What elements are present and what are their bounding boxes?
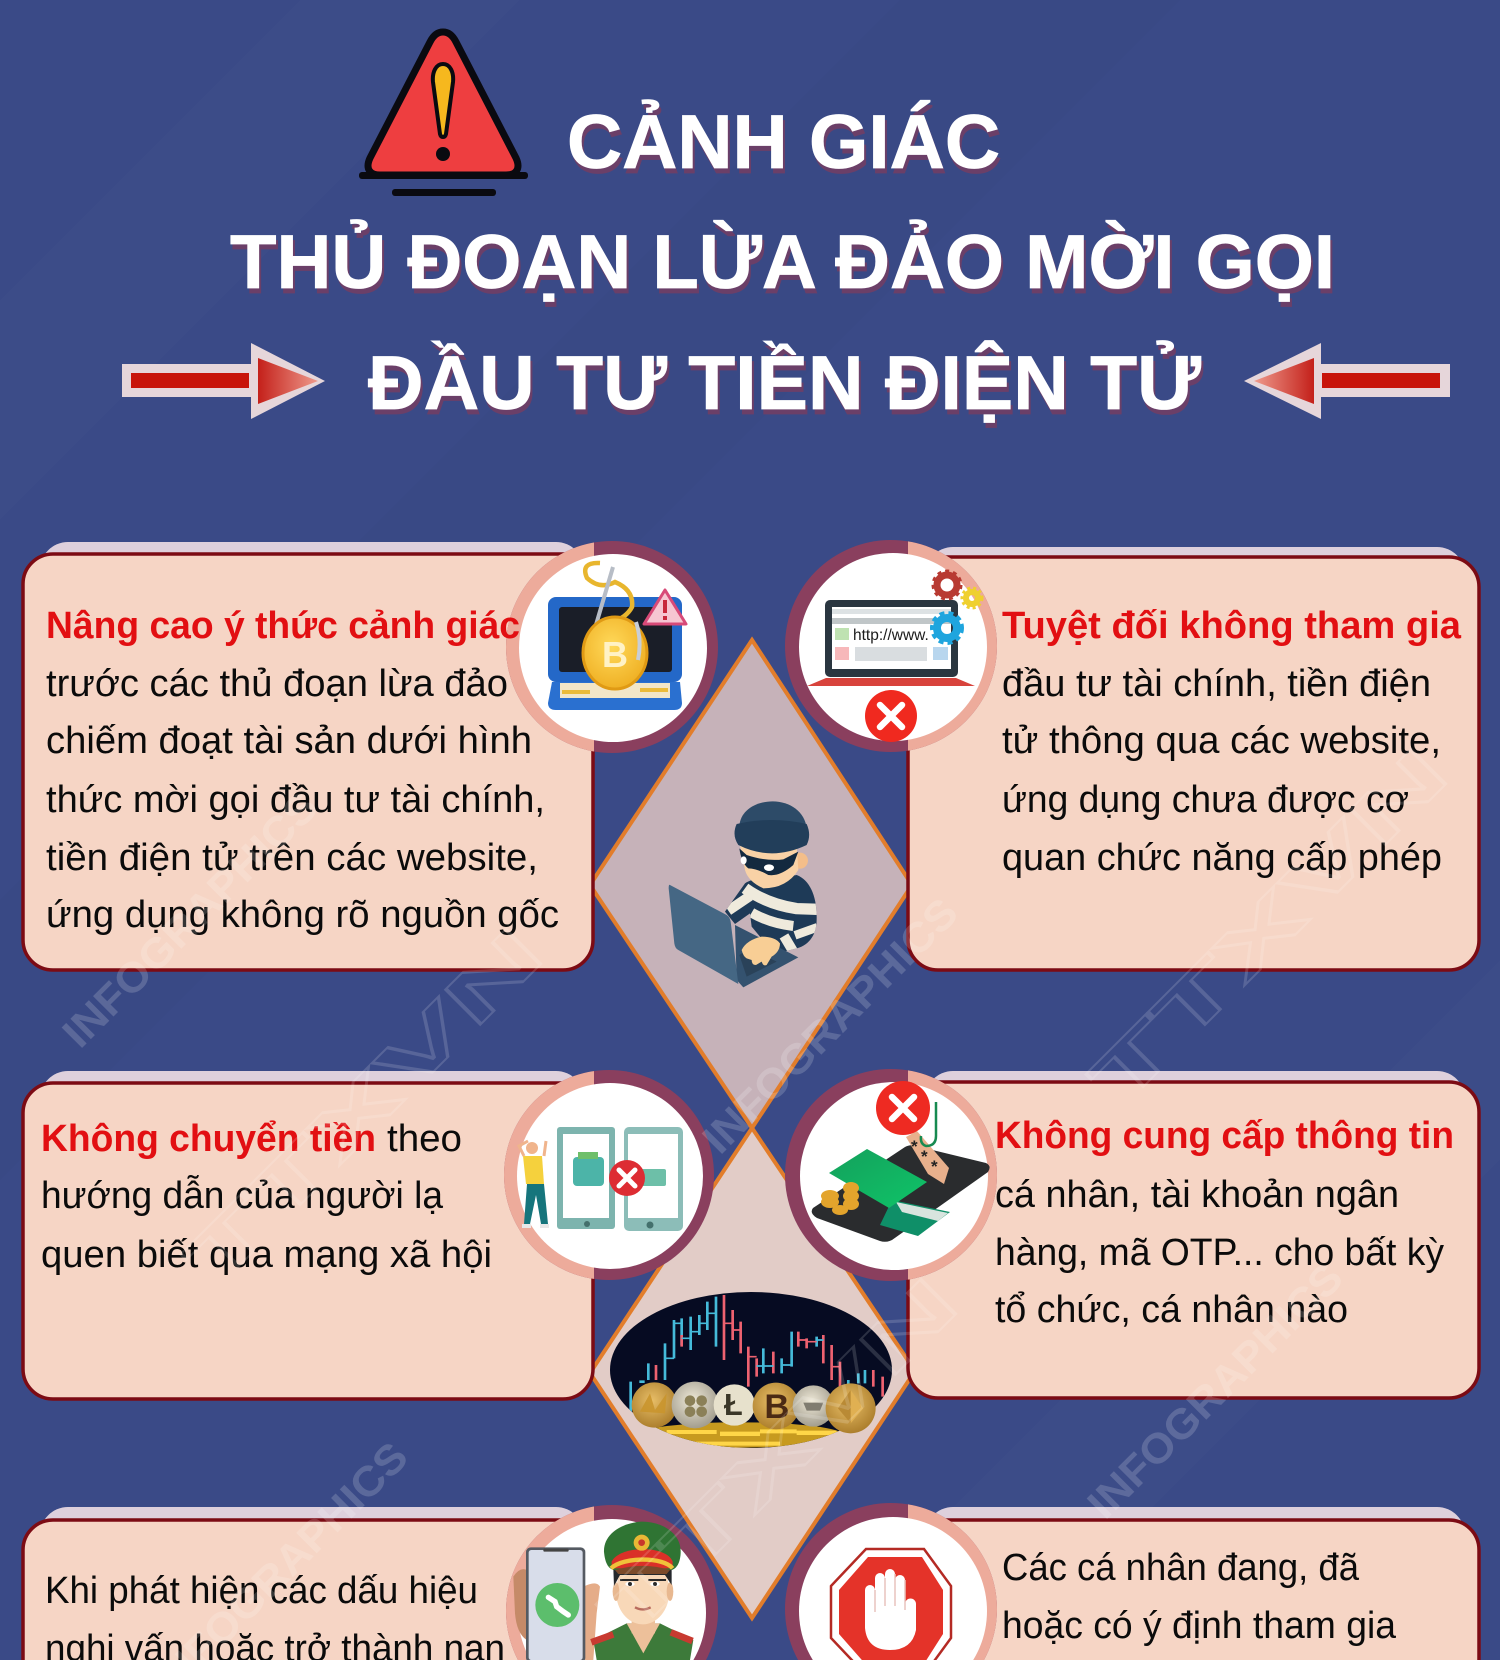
panel: card 3 — [23, 1070, 714, 1399]
text: card 2: ứng dụng chưa được cơ — [1002, 779, 1409, 821]
text: card 3: Không chuyển tiền — [41, 1118, 376, 1160]
title — [230, 100, 1335, 426]
text: card 3: hướng dẫn của người lạ — [41, 1174, 444, 1217]
text: card 1: thức mời gọi đầu tư tài chính, — [46, 779, 545, 821]
text: card 3 — [41, 1118, 492, 1276]
text: card 1 — [46, 605, 559, 936]
text: card 2: quan chức năng cấp phép — [1002, 837, 1442, 879]
icon: circle do not transfer money — [504, 1070, 714, 1280]
text: card 2: tử thông qua các website, — [1002, 720, 1441, 762]
panel: card 5 — [23, 1505, 718, 1660]
text: card 4: tổ chức, cá nhân nào — [995, 1289, 1348, 1331]
icon: warning triangle — [359, 32, 528, 196]
text: card 3: theo — [387, 1118, 462, 1160]
text: card 6: Các cá nhân đang, đã — [1002, 1547, 1360, 1589]
icon: circle bank cards and OTP: * — [921, 1147, 928, 1166]
panel: upper centre diamond — [590, 640, 912, 1128]
watermark: INFOGRAPHICS and TTXVN — [53, 732, 1464, 1660]
watermark: INFOGRAPHICS and TTXVN: INFOGRAPHICS — [693, 889, 967, 1162]
text: card 2 — [1002, 605, 1462, 879]
icon: circle police officer and phone — [506, 1505, 718, 1660]
arrow: right — [1244, 343, 1450, 419]
text: card 3: quen biết qua mạng xã hội — [41, 1234, 492, 1276]
text: card 1: chiếm đoạt tài sản dưới hình — [46, 720, 532, 762]
icon: circle bank cards and OTP: * — [931, 1157, 938, 1176]
icon: circle phishing bitcoin laptop: B — [602, 634, 628, 675]
icon: crypto chart with coins: Ł — [724, 1388, 743, 1422]
arrow: left — [122, 343, 325, 419]
text: card 6 — [1002, 1547, 1397, 1647]
icon: crypto chart with coins: B — [764, 1388, 789, 1426]
watermark: INFOGRAPHICS and TTXVN: TTXVN — [1075, 732, 1464, 1121]
watermark: INFOGRAPHICS and TTXVN: INFOGRAPHICS — [1078, 1254, 1352, 1527]
text: card 2: đầu tư tài chính, tiền điện — [1002, 663, 1431, 705]
icon: circle bank cards and OTP — [785, 1069, 997, 1281]
text: card 1: Nâng cao ý thức cảnh giác — [46, 605, 520, 647]
text: card 1: ứng dụng không rõ nguồn gốc — [46, 894, 559, 936]
text: card 4: Không cung cấp thông tin — [995, 1115, 1454, 1157]
watermark: INFOGRAPHICS and TTXVN: TTXVN — [170, 912, 559, 1301]
icon: circle stop hand — [785, 1503, 997, 1660]
text: card 4 — [995, 1115, 1454, 1331]
watermark: INFOGRAPHICS and TTXVN: INFOGRAPHICS — [53, 783, 327, 1056]
icon: circle bank cards and OTP: * — [911, 1137, 918, 1156]
watermark: INFOGRAPHICS and TTXVN: TTXVN — [585, 1262, 974, 1651]
icon: circle unlicensed website laptop: http://www. — [853, 627, 929, 644]
icon: circle unlicensed website laptop — [785, 540, 997, 752]
icon: circle phishing bitcoin laptop — [506, 541, 718, 753]
text: card 2: Tuyệt đối không tham gia — [1002, 605, 1462, 647]
text: card 1: tiền điện tử trên các website, — [46, 837, 538, 879]
text: card 6: hoặc có ý định tham gia — [1002, 1605, 1397, 1647]
panel: card 2 — [785, 540, 1479, 970]
text: card 1: trước các thủ đoạn lừa đảo — [46, 663, 508, 705]
icon: crypto chart with coins — [610, 1292, 892, 1448]
title: THỦ ĐOẠN LỪA ĐẢO MỜI GỌI — [230, 220, 1335, 305]
panel: card 6 — [785, 1503, 1479, 1660]
title: ĐẦU TƯ TIỀN ĐIỆN TỬ — [368, 340, 1202, 426]
text: card 5: Khi phát hiện các dấu hiệu — [45, 1570, 478, 1612]
panel: card 1 — [23, 541, 718, 970]
title: CẢNH GIÁC — [567, 100, 1000, 185]
panel: lower centre diamond — [590, 1128, 915, 1618]
text: card 4: cá nhân, tài khoản ngân — [995, 1174, 1399, 1216]
text: card 5 — [45, 1570, 505, 1660]
panel: card 4 — [785, 1069, 1479, 1398]
text: card 4: hàng, mã OTP... cho bất kỳ — [995, 1232, 1444, 1274]
icon: thief with laptop — [669, 801, 818, 987]
